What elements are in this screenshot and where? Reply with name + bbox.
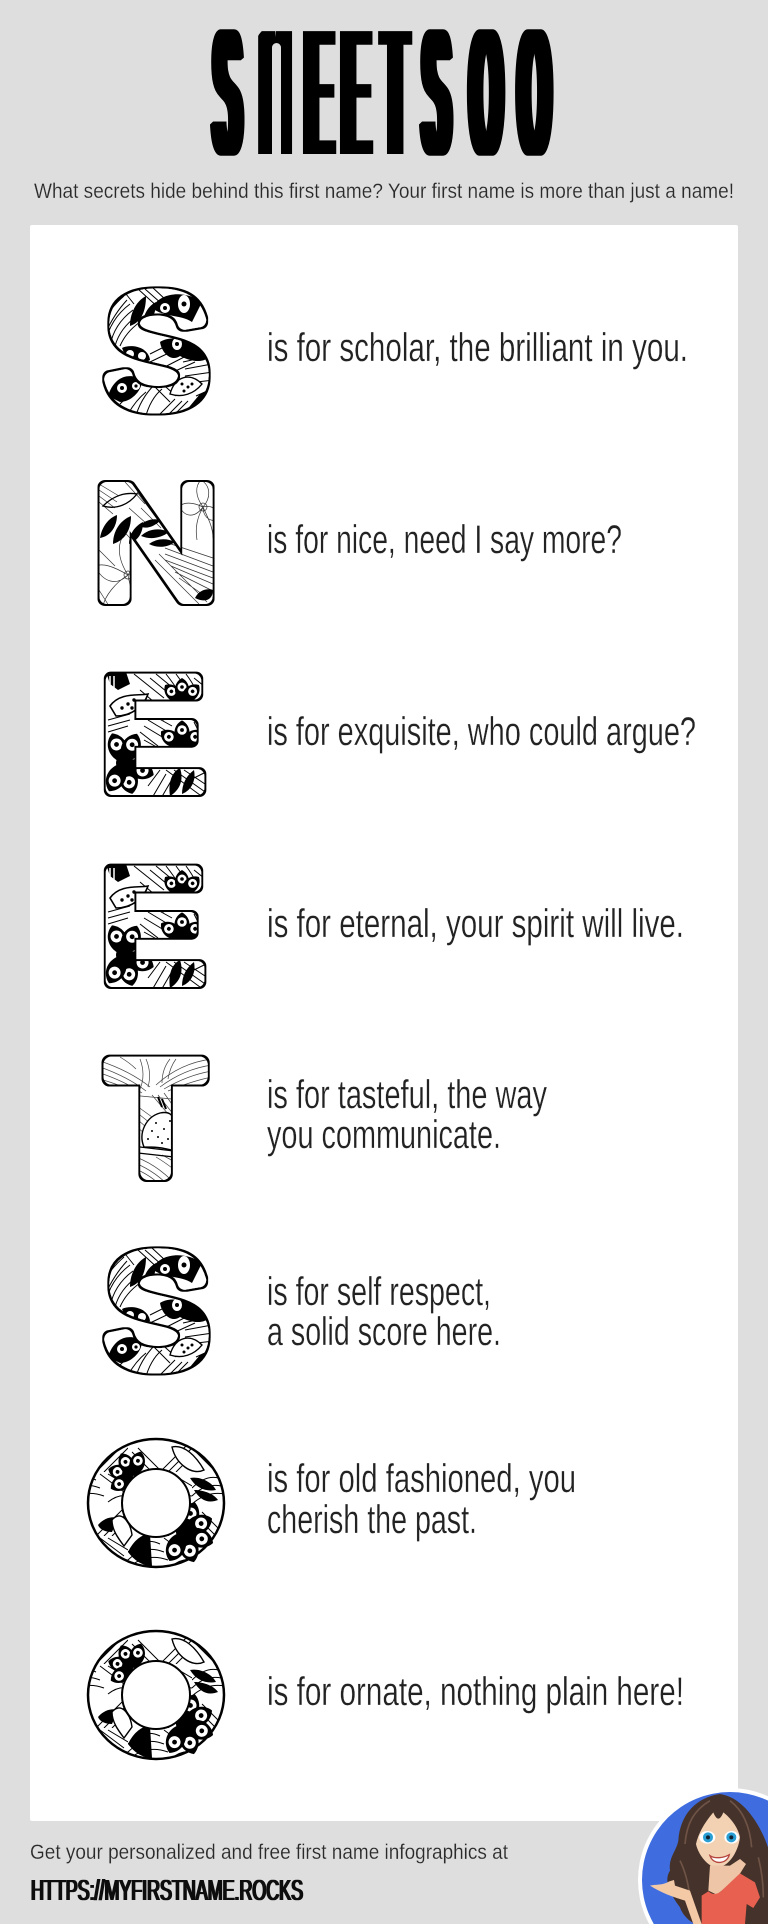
row: O for old fashioned (88, 1439, 576, 1567)
icon: avatar (638, 1788, 768, 1924)
icon: doodle letter S: S (104, 264, 209, 439)
icon: doodle letter E: E (100, 840, 204, 1014)
icon: doodle letter E: E (100, 648, 204, 822)
text: T lines: is for tasteful, the way (267, 1073, 547, 1117)
footer url: HTTPS://MYFIRSTNAME.ROCKS (31, 1875, 303, 1907)
row: E for eternal (100, 840, 684, 1014)
panel: letters (30, 225, 738, 1821)
row: E for exquisite (100, 648, 696, 822)
footer call to action: Get your personalized and free first name infographics at (30, 1841, 508, 1864)
icon: doodle letter O (88, 1439, 224, 1567)
icon: doodle letter O (88, 1631, 224, 1759)
row: T for tasteful (108, 1032, 547, 1206)
text: S lines (267, 1270, 501, 1354)
text: S lines: a solid score here. (267, 1310, 501, 1354)
row: S for self respect (104, 1224, 501, 1399)
text: T lines: you communicate. (267, 1113, 501, 1157)
text: N line: is for nice, need I say more? (267, 518, 622, 562)
text: O lines: is for old fashioned, you (267, 1457, 576, 1501)
text: O lines (267, 1457, 576, 1542)
row: S for scholar (104, 264, 688, 439)
text: O lines: cherish the past. (267, 1498, 477, 1542)
row: O for ornate (88, 1631, 684, 1759)
icon: doodle letter N: N (93, 456, 219, 631)
icon: doodle letter T: T (108, 1032, 203, 1206)
row: N for nice (93, 456, 622, 631)
text: S lines: is for self respect, (267, 1270, 491, 1314)
text: T lines (267, 1073, 547, 1157)
icon: doodle letter S: S (104, 1224, 209, 1399)
